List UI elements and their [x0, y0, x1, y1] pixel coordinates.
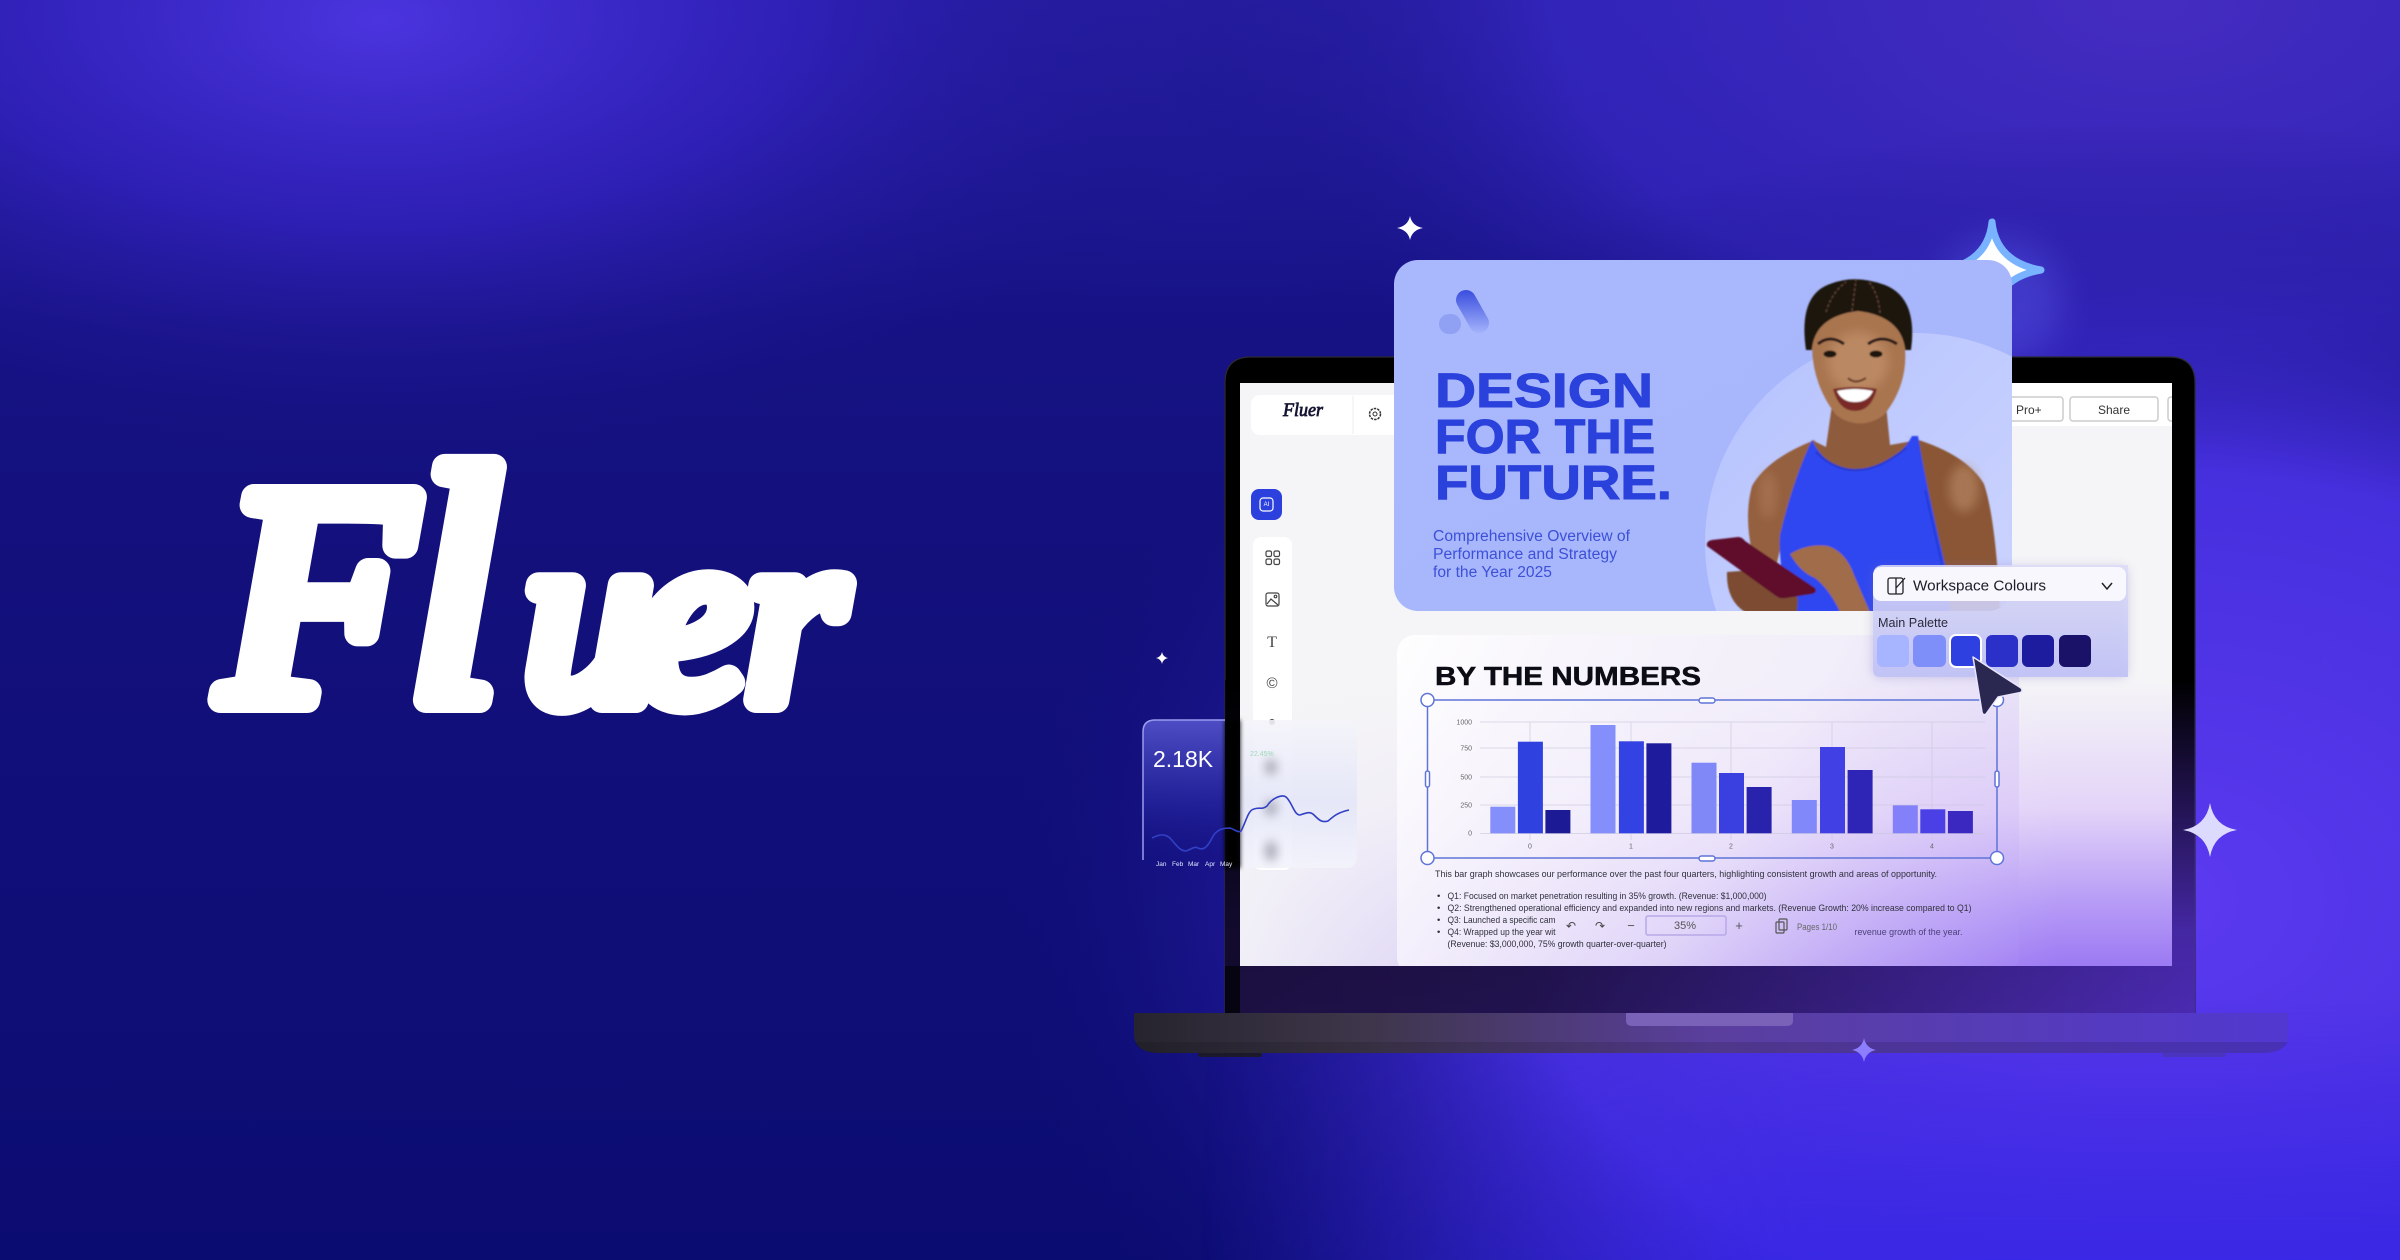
- editor bottom toolbar: +: [1735, 918, 1743, 933]
- slide title: FOR THE: [1435, 411, 1655, 464]
- hair: [1804, 279, 1912, 350]
- axis labels: 250: [1460, 802, 1472, 810]
- month labels: [1156, 861, 1233, 868]
- editor bottom toolbar: −: [1627, 918, 1635, 933]
- quarterly bullet list: •: [1437, 903, 1440, 914]
- axis labels: 750: [1460, 746, 1472, 752]
- month labels: Jan: [1156, 861, 1167, 868]
- slide title: DESIGN: [1435, 365, 1653, 418]
- hero slide card: [1394, 260, 2012, 611]
- chart selection frame: [1421, 694, 2004, 864]
- cheeks: [1828, 332, 1888, 392]
- blurred tools behind glass: [1265, 759, 1277, 861]
- workspace colours popup: [1872, 565, 2128, 678]
- popup header: Workspace Colours: [1913, 578, 2046, 594]
- laptop: [1134, 357, 2288, 1057]
- quarterly bullet list: •: [1437, 915, 1440, 926]
- laptop base: [1134, 1013, 2288, 1057]
- editor bottom toolbar: Pages 1/10: [1797, 922, 1837, 933]
- axis labels: 2: [1729, 844, 1733, 850]
- Fluer wordmark: e: [636, 478, 747, 755]
- brows: [1818, 339, 1897, 344]
- month labels: Apr: [1205, 861, 1216, 868]
- cursor arrow: [1973, 657, 2022, 715]
- hair braids: [1826, 279, 1880, 313]
- star: large outlined top right: [1943, 222, 2041, 318]
- value: 2.18K: 2.18K: [1153, 746, 1214, 772]
- star: faint right: [2313, 655, 2337, 679]
- main palette label: Main Palette: [1878, 616, 1948, 630]
- right shoulder and arm: [1905, 436, 2000, 612]
- popup panel: [1873, 565, 2128, 677]
- icon: grid: [1266, 551, 1280, 564]
- app top bar: right buttons: Share: [2098, 403, 2130, 417]
- pointing hand and forearm: [1790, 545, 1870, 612]
- slide subtitle: [1433, 528, 1631, 581]
- photo: smiling woman with phone: [1705, 278, 2012, 611]
- slide subtitle: for the Year 2025: [1433, 564, 1552, 581]
- slide subtitle: Performance and Strategy: [1433, 546, 1617, 563]
- app top bar: Fluer logo pill: Fluer: [1282, 400, 1324, 421]
- popup header: [1873, 567, 2126, 601]
- star: bottom on laptop base: [1852, 1038, 1876, 1062]
- laptop screen: [1240, 383, 2172, 966]
- AI tool button: [1251, 489, 1282, 520]
- left upper arm: [1746, 440, 1816, 564]
- slide title: [1435, 365, 1672, 510]
- month labels: Feb: [1172, 861, 1184, 868]
- left tool rail: [1253, 537, 1292, 870]
- smile: [1833, 387, 1877, 411]
- month labels: May: [1220, 861, 1233, 868]
- popup shadow: [1872, 566, 2128, 678]
- slide title: FUTURE.: [1435, 457, 1672, 510]
- colour swatches: [1877, 635, 2091, 667]
- star: large soft right: [2183, 803, 2237, 857]
- editor bottom toolbar: ↷: [1595, 919, 1605, 933]
- month labels: Mar: [1188, 861, 1200, 868]
- editor bottom toolbar: [1566, 916, 1837, 935]
- holding hand under phone: [1727, 570, 1798, 612]
- axis labels: 1: [1629, 844, 1633, 850]
- quarterly bullet list: Q2: Strengthened operational efficiency and expanded into new regions and markets. (Revenue Growth: 20% increase compared to Q1): [1448, 903, 1972, 914]
- star: tiny left: [1156, 652, 1168, 664]
- trend line: [1152, 796, 1349, 851]
- quarterly bullet list: Q3: Launched a specific cam: [1448, 915, 1556, 926]
- Fluer wordmark: F: [217, 425, 416, 768]
- eyes: [1824, 350, 1836, 358]
- quarterly bullet list: revenue growth of the year.: [1854, 927, 1962, 938]
- app top bar: right buttons: [2012, 383, 2172, 426]
- left shoulder highlight: [1759, 471, 1777, 519]
- editor bottom toolbar: 35%: [1674, 920, 1696, 932]
- axis labels: 0: [1468, 830, 1472, 838]
- AI tool button: AI: [1264, 502, 1270, 508]
- neck: [1812, 408, 1909, 470]
- brand logo mark: [1439, 300, 1479, 334]
- quarterly bullet list: Q1: Focused on market penetration resulting in 35% growth. (Revenue: $1,000,000): [1448, 891, 1766, 902]
- quarterly bullet list: •: [1437, 891, 1440, 902]
- right shoulder highlight: [1949, 464, 1979, 512]
- decorative glow behind star: [1938, 238, 2062, 362]
- Fluer wordmark: r: [746, 478, 845, 755]
- axis labels: 0: [1528, 844, 1532, 850]
- lower slide: by the numbers: [1397, 635, 2019, 975]
- icon: partially hidden tool: [1269, 719, 1275, 725]
- gridlines: [1480, 722, 1985, 840]
- Fluer wordmark: l: [408, 401, 501, 773]
- bars: [1490, 725, 1973, 833]
- face: [1812, 311, 1905, 424]
- Fluer wordmark: [217, 401, 845, 773]
- icon: text tool: T: [1267, 634, 1277, 651]
- icon: image: [1266, 593, 1279, 606]
- axis labels: [1456, 720, 1934, 850]
- glass panel: [1143, 720, 1357, 868]
- chart description text: This bar graph showcases our performance over the past four quarters, highlighting consistent growth and areas of opportunity.: [1435, 869, 1937, 880]
- heading: by the numbers: BY THE NUMBERS: [1435, 661, 1701, 691]
- axis labels: 500: [1460, 774, 1472, 782]
- icon: copyright: ©: [1266, 675, 1278, 692]
- nose: [1848, 378, 1866, 382]
- slide subtitle: Comprehensive Overview of: [1433, 528, 1631, 545]
- axis labels: 4: [1930, 844, 1934, 850]
- laptop lid body: [1225, 357, 2195, 1013]
- quarterly bullet list: [1437, 891, 1972, 950]
- axis labels: 3: [1830, 844, 1834, 850]
- Fluer wordmark: u: [525, 478, 650, 755]
- delta: 22.45%: 22.45%: [1250, 751, 1274, 758]
- blue dress: [1780, 436, 1950, 612]
- phone: [1707, 537, 1816, 598]
- bar chart: [1456, 720, 1985, 850]
- app top bar: right buttons: Pro+: [2016, 403, 2042, 417]
- editor bottom toolbar: ↶: [1566, 919, 1576, 933]
- woman figure: [1707, 279, 2000, 612]
- star: small top: [1397, 216, 1423, 240]
- app top bar: Fluer logo pill: [1251, 395, 1401, 435]
- quarterly bullet list: Q4: Wrapped up the year wit: [1448, 927, 1556, 938]
- photo backdrop circle: [1705, 333, 2012, 611]
- quarterly bullet list: (Revenue: $3,000,000, 75% growth quarter-over-quarter): [1448, 939, 1666, 950]
- axis labels: 1000: [1456, 720, 1472, 726]
- stats glass card: [1143, 720, 1357, 868]
- quarterly bullet list: •: [1437, 927, 1440, 938]
